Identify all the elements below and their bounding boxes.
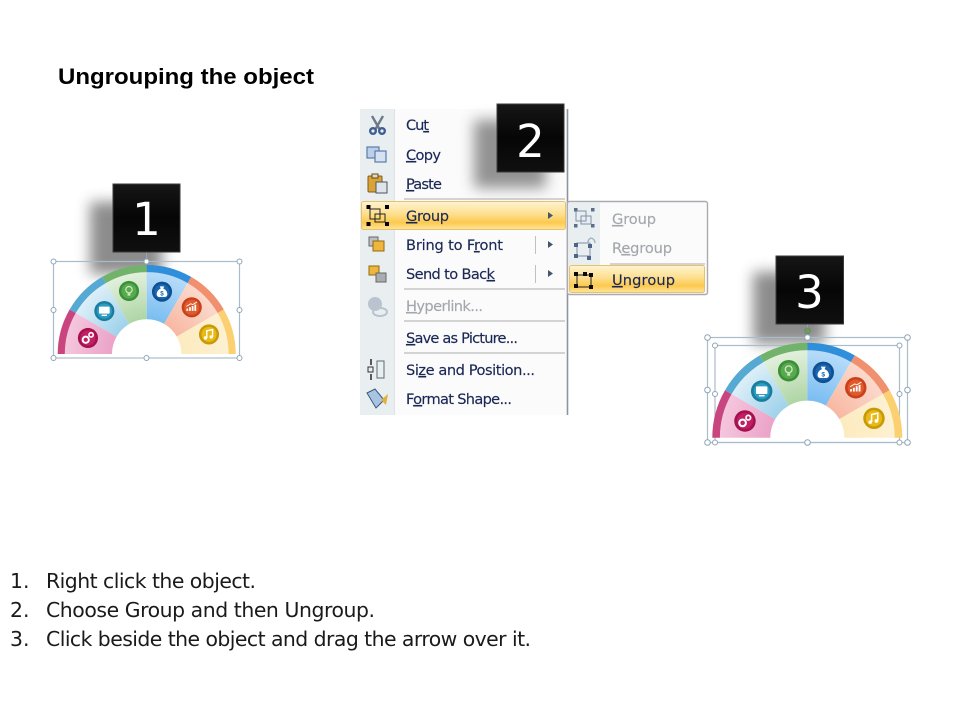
badge 1: 1 (132, 193, 161, 246)
shadow: step 1 badge (90, 202, 162, 274)
icon: gears (734, 410, 756, 432)
diagram 1: grouped semicircle (51, 252, 242, 360)
icon: chart (845, 377, 866, 398)
menu labels (406, 117, 535, 408)
menu labels: Cut (406, 117, 429, 134)
icon: money bag (813, 362, 834, 383)
menu labels: Size and Position... (406, 362, 535, 379)
menu labels: Paste (406, 176, 442, 193)
context menu (360, 109, 568, 415)
shadow: step 3 badge (753, 272, 825, 344)
menu labels: Group (406, 208, 449, 225)
menu labels: Bring to Front (406, 237, 503, 254)
icon: group (366, 205, 389, 226)
icon: copy (367, 147, 386, 162)
menu labels: Hyperlink... (406, 298, 483, 315)
selection boxes (705, 324, 910, 445)
icon: scissors (370, 116, 385, 134)
instructions list: 1. (10, 569, 29, 593)
instructions list: Right click the object. (46, 569, 256, 593)
semicircle chart (58, 265, 236, 354)
submenu labels: Regroup (612, 240, 672, 257)
submenu (568, 202, 708, 294)
menu background (360, 109, 568, 415)
instructions list (10, 569, 531, 651)
icon: bring to front (369, 237, 384, 251)
badge 3 (776, 256, 844, 324)
icon: money bag: $ (821, 372, 825, 379)
menu labels: Format Shape... (406, 391, 512, 408)
icon: hyperlink (368, 297, 387, 316)
menu labels: Copy (406, 147, 441, 164)
ungroup highlight row (570, 266, 704, 292)
icon: group disabled (574, 208, 594, 228)
icon: ungroup (574, 272, 593, 289)
shadow: step 2 badge (474, 120, 546, 188)
icon: send to back (369, 266, 386, 282)
separators (404, 199, 565, 353)
icon: paste (368, 174, 387, 193)
icon: format shape (367, 389, 388, 408)
badge 2: 2 (516, 115, 545, 168)
selection box (51, 252, 242, 360)
badge 1 (113, 184, 180, 252)
submenu panel (568, 202, 708, 294)
submenu labels: Group (612, 211, 656, 228)
instructions list: Click beside the object and drag the arrow over it. (46, 627, 531, 651)
icon: size and position (368, 359, 384, 380)
badge 2 (497, 104, 564, 172)
submenu labels (612, 211, 675, 289)
instructions list: 3. (10, 627, 29, 651)
semicircle chart (712, 343, 902, 438)
icon: chart (182, 297, 202, 317)
icon: music note (199, 324, 219, 344)
instructions list: 2. (10, 598, 29, 622)
submenu arrows (548, 212, 553, 277)
submenu labels: Ungroup (612, 272, 675, 289)
menu labels: Save as Picture... (406, 330, 518, 347)
icon: light bulb (119, 281, 139, 301)
icon: music note (863, 408, 885, 429)
icon: monitor (94, 301, 114, 321)
menu icon column (360, 109, 394, 415)
icon: monitor (751, 380, 772, 402)
icon: gears (78, 328, 98, 348)
instructions list: Choose Group and then Ungroup. (46, 598, 375, 622)
menu labels: Send to Back (406, 266, 496, 283)
icon: money bag: $ (160, 291, 164, 298)
badge 3: 3 (795, 266, 824, 319)
icon: regroup disabled (574, 238, 595, 260)
icon: money bag (152, 282, 172, 302)
icon: light bulb (778, 360, 799, 381)
diagram 3: ungrouped semicircle (705, 324, 910, 445)
title: Ungrouping the object (58, 64, 315, 89)
group highlight row (362, 202, 566, 230)
